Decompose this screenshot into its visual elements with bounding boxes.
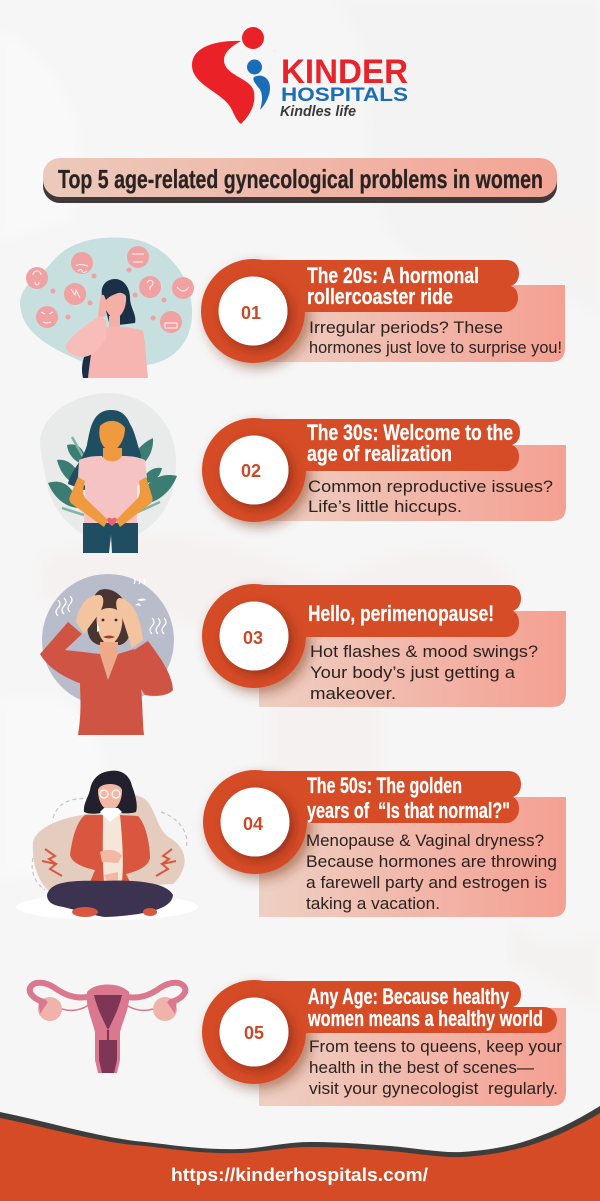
hair bbox=[88, 589, 131, 645]
logo: Kinder Hospitals bbox=[192, 27, 408, 124]
text: card 02: Common reproductive issues? bbox=[308, 478, 553, 496]
panel: card 01 body bbox=[259, 285, 565, 362]
text: card 02: Life’s little hiccups. bbox=[308, 498, 462, 516]
shirt bbox=[78, 456, 147, 525]
text: card 01 bbox=[309, 319, 562, 357]
jeans bbox=[83, 523, 138, 553]
heading: perimenopause: Hello, perimenopause! bbox=[308, 601, 494, 626]
hair bbox=[68, 410, 141, 490]
sleeve bbox=[66, 316, 106, 357]
text: card 05: health in the best of scenes— bbox=[309, 1059, 535, 1077]
panel: card 03 body bbox=[259, 611, 566, 707]
sweater bbox=[78, 649, 144, 735]
title pill bbox=[43, 158, 557, 203]
text: card 03: Hot flashes & mood swings? bbox=[310, 643, 538, 661]
text: card 03: Your body’s just getting a bbox=[310, 664, 516, 682]
text: card 04: taking a vacation. bbox=[306, 895, 440, 913]
face bbox=[104, 292, 126, 318]
cardigan bbox=[70, 815, 104, 882]
number badge 04: 04 bbox=[243, 814, 263, 834]
hands and forearms bbox=[76, 595, 103, 634]
number badge 03 bbox=[202, 584, 521, 688]
panel: card 05 body bbox=[259, 1008, 566, 1106]
text: card 04 bbox=[306, 832, 557, 913]
number badge 02 bbox=[202, 418, 520, 522]
arms bbox=[69, 477, 108, 527]
curly hair bbox=[84, 771, 137, 814]
number badge 05: 05 bbox=[244, 1023, 264, 1043]
heading: the 20s: rollercoaster ride bbox=[307, 284, 453, 309]
logo wordmark: KINDER bbox=[281, 53, 408, 91]
number badge 05 bbox=[202, 980, 557, 1084]
illustration: woman holding lower abdomen bbox=[40, 393, 177, 553]
text: card 04: a farewell party and estrogen is bbox=[306, 874, 547, 892]
heading: the 20s bbox=[307, 263, 479, 309]
hair back bbox=[82, 345, 100, 378]
card 04 bbox=[203, 770, 566, 917]
footer band bbox=[0, 1106, 600, 1201]
number badge 03: 03 bbox=[243, 628, 263, 648]
logo wordmark: HOSPITALS bbox=[281, 85, 408, 106]
panel: card 04 body bbox=[259, 797, 566, 917]
heading: the 20s: The 20s: A hormonal bbox=[307, 263, 479, 288]
text: card 02 bbox=[308, 478, 553, 516]
sweater bbox=[88, 327, 148, 378]
text: card 04: Because hormones are throwing bbox=[306, 853, 557, 871]
heading: the 30s: age of realization bbox=[307, 441, 452, 466]
heading: any age: Any Age: Because healthy bbox=[308, 984, 510, 1009]
heading: any age bbox=[307, 984, 543, 1031]
text: card 03: makeover. bbox=[310, 685, 396, 703]
icon: blue figure bbox=[247, 60, 270, 110]
number badge 01 bbox=[201, 259, 519, 363]
illustration: stressed woman with emotions bbox=[20, 238, 194, 378]
card 05 bbox=[202, 980, 566, 1106]
heading: the 50s: years of “Is that normal?" bbox=[307, 798, 510, 823]
heading: the 50s bbox=[307, 773, 510, 823]
heading: the 30s bbox=[307, 420, 513, 466]
panel: card 02 body bbox=[259, 445, 566, 521]
illustration: seated woman with cramps bbox=[16, 771, 198, 920]
logo wordmark: Kindles life bbox=[280, 103, 356, 120]
heading: the 30s: The 30s: Welcome to the bbox=[307, 420, 513, 445]
number badge 04 bbox=[203, 770, 521, 874]
number badge 01: 01 bbox=[241, 303, 261, 323]
text: card 05: From teens to queens, keep your bbox=[309, 1038, 563, 1056]
number badge 02: 02 bbox=[241, 461, 261, 481]
heading: the 50s: The 50s: The golden bbox=[307, 773, 462, 798]
website url: https://kinderhospitals.com/ bbox=[171, 1165, 428, 1185]
top bbox=[100, 815, 125, 880]
text: card 05: visit your gynecologist regularly. bbox=[309, 1080, 558, 1098]
text: card 01: hormones just love to surprise you! bbox=[309, 339, 562, 357]
text: card 03 bbox=[310, 643, 538, 703]
icon: red figure bbox=[192, 27, 264, 124]
card 02 bbox=[202, 418, 566, 522]
card 03 bbox=[202, 584, 566, 707]
floor bbox=[16, 894, 198, 920]
illustration: worried woman holding head bbox=[40, 574, 174, 735]
text: card 01: Irregular periods? These bbox=[309, 319, 503, 337]
logo wordmark bbox=[280, 53, 408, 120]
text: card 04: Menopause & Vaginal dryness? bbox=[306, 832, 544, 850]
illustration: uterus bbox=[30, 983, 185, 1073]
card 01 bbox=[201, 259, 565, 363]
text: card 05 bbox=[309, 1038, 563, 1098]
